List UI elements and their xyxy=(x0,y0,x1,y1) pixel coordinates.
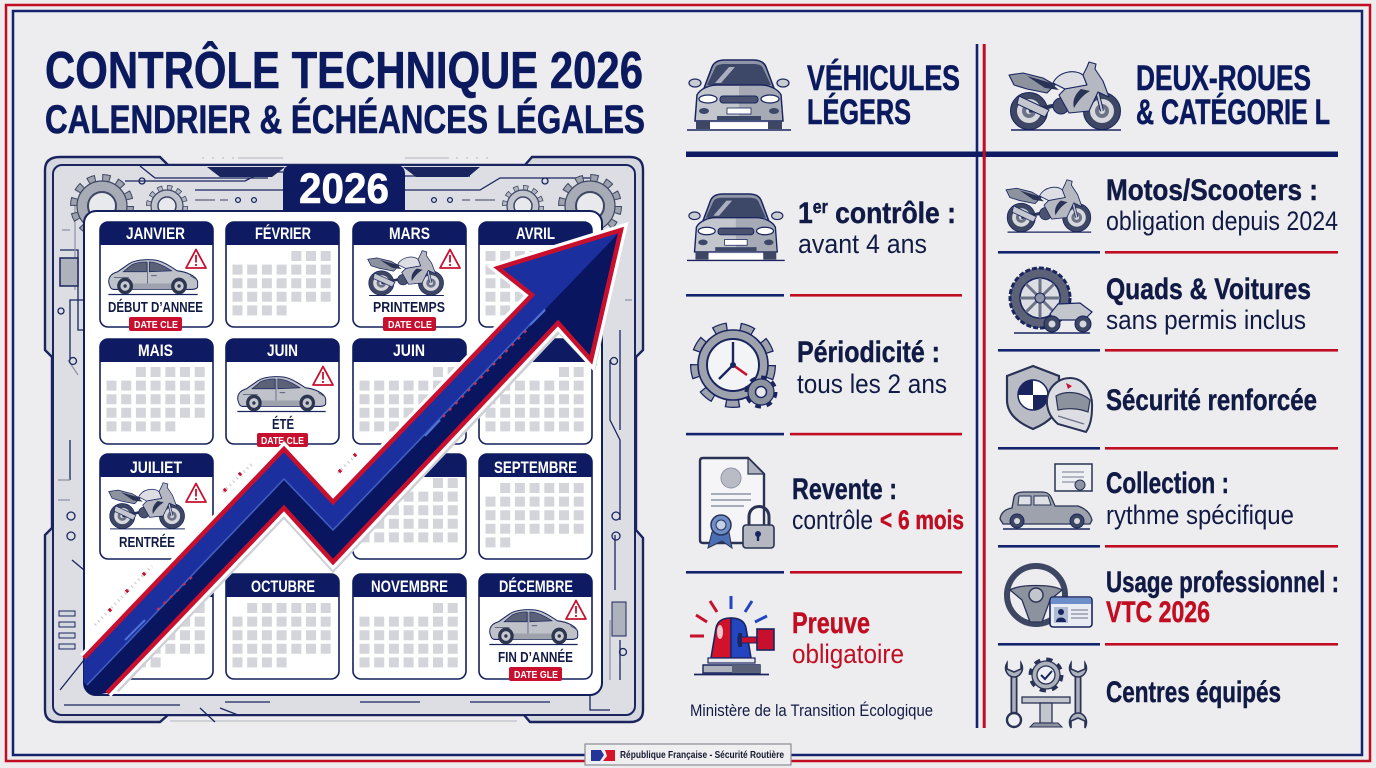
icon: certificate and lock xyxy=(700,458,774,548)
month: mais xyxy=(100,339,213,444)
text: premier contrôle xyxy=(798,197,956,259)
month: juillet: JUILIET xyxy=(130,459,182,477)
month: novembre xyxy=(353,574,466,679)
title xyxy=(45,41,645,142)
text: revente: < 6 mois xyxy=(880,505,964,535)
divider xyxy=(686,294,962,297)
text: périodicité: Périodicité : xyxy=(797,336,940,369)
divider xyxy=(998,447,1338,450)
month: mars: PRINTEMPS xyxy=(373,300,445,316)
red line over rule xyxy=(983,150,986,159)
heading: véhicules légers: VÉHICULES xyxy=(807,58,960,98)
text: motos xyxy=(1106,174,1338,236)
icon: siren xyxy=(690,596,774,674)
icon: motorbike xyxy=(1006,180,1091,232)
icon: steering wheel and card xyxy=(1007,566,1092,627)
month: février xyxy=(226,222,339,327)
month: janvier: DÉBUT D’ANNEE xyxy=(108,299,203,316)
icon: shield and helmet xyxy=(1007,366,1092,432)
month: hidden behind arrow, row 4 xyxy=(130,592,214,680)
text: périodicité: tous les 2 ans xyxy=(797,369,947,399)
calendar white panel xyxy=(84,211,602,695)
text: revente: Revente : xyxy=(792,473,897,506)
month: janvier xyxy=(100,222,213,331)
text: quads xyxy=(1106,273,1311,335)
text: quads: sans permis inclus xyxy=(1106,305,1306,335)
month: janvier: DATE CLE xyxy=(134,319,178,331)
month: octobre: OCTUBRE xyxy=(251,578,315,596)
icon: clock and gear xyxy=(695,327,775,406)
month: mais: MAIS xyxy=(138,342,173,360)
heading: véhicules légers: LÉGERS xyxy=(807,92,911,132)
month: janvier: JANVIER xyxy=(126,225,185,243)
text: preuve obligatoire: Preuve xyxy=(792,607,870,640)
trend arrow xyxy=(84,230,624,695)
month: septembre xyxy=(479,454,592,559)
month: juin (été) xyxy=(226,339,339,447)
month: juin (second): JUIN xyxy=(393,342,425,360)
month: décembre: DATE GLE xyxy=(514,669,558,681)
month: mars: MARS xyxy=(389,225,430,243)
heading: véhicules légers xyxy=(807,58,960,132)
text: preuve obligatoire: obligatoire xyxy=(792,639,904,669)
gears xyxy=(74,178,618,234)
text: premier contrôle: avant 4 ans xyxy=(798,229,927,259)
month: décembre: FIN D’ANNÉE xyxy=(498,649,573,666)
month: juin (second) xyxy=(353,339,466,444)
text: revente: contrôle xyxy=(792,505,873,535)
month: avril xyxy=(479,222,592,327)
text: quads: Quads & Voitures xyxy=(1106,273,1311,306)
text: sécurité: Sécurité renforcée xyxy=(1106,384,1317,417)
icon: vintage car and certificate xyxy=(1000,464,1092,529)
year tab: 2026 xyxy=(299,165,389,213)
icon: car front large xyxy=(687,60,791,130)
month: juin (été): JUIN xyxy=(267,342,298,360)
text: collection: Collection : xyxy=(1106,467,1229,500)
divider xyxy=(998,349,1338,352)
column separator xyxy=(976,44,986,728)
month: septembre: SEPTEMBRE xyxy=(494,459,577,477)
divider xyxy=(998,643,1338,646)
text: collection: rythme spécifique xyxy=(1106,500,1294,530)
footer badge xyxy=(585,744,791,765)
text: motos: Motos/Scooters : xyxy=(1106,174,1318,207)
panel: deux-roues xyxy=(998,59,1339,728)
icon: car front xyxy=(687,194,785,260)
header rule xyxy=(686,152,1338,157)
divider xyxy=(686,433,962,435)
title: CONTRÔLE TECHNIQUE 2026 xyxy=(45,41,643,100)
text: motos: obligation depuis 2024 xyxy=(1106,206,1338,236)
month: avril: AVRIL xyxy=(516,225,555,243)
icon: quad and tyre xyxy=(1010,268,1092,333)
month: juillet xyxy=(100,454,213,559)
calendar frame xyxy=(45,157,643,722)
title: CALENDRIER & ÉCHÉANCES LÉGALES xyxy=(45,97,645,142)
text: centres équipés: Centres équipés xyxy=(1106,676,1281,709)
icon: tools and gear xyxy=(1006,660,1086,728)
text: premier contrôle: er xyxy=(813,197,828,217)
icon: motorbike large xyxy=(1009,62,1121,130)
month: mars xyxy=(353,222,466,331)
month: novembre: NOVEMBRE xyxy=(371,578,448,596)
text: périodicité xyxy=(797,336,947,399)
dashed speed ticks xyxy=(95,453,358,625)
footer badge: République Française - Sécurité Routière xyxy=(620,749,784,761)
month: octobre xyxy=(226,574,339,679)
icon: french flag xyxy=(591,750,615,761)
month: hidden behind arrow, row 2 xyxy=(479,339,592,444)
month: juillet: RENTRÉE xyxy=(119,534,175,551)
text: revente xyxy=(792,473,964,535)
month: décembre: DÉCEMBRE xyxy=(499,577,573,596)
text: preuve obligatoire xyxy=(792,607,904,669)
month: mars: DATE CLE xyxy=(388,319,432,331)
text: collection xyxy=(1106,467,1294,530)
text: premier contrôle: 1 xyxy=(798,197,815,230)
divider xyxy=(998,545,1338,548)
divider xyxy=(686,571,962,574)
month: décembre xyxy=(479,574,592,681)
text: usage professionnel: VTC 2026 xyxy=(1106,596,1210,629)
month: hidden behind arrow, row 3 xyxy=(353,454,466,559)
heading: deux-roues: DEUX-ROUES xyxy=(1136,59,1311,98)
month: juin (été): DATE CLE xyxy=(261,435,304,447)
month: juin (été): ÉTÉ xyxy=(272,416,294,433)
heading: deux-roues xyxy=(1136,59,1330,132)
text: usage professionnel xyxy=(1106,566,1339,629)
divider xyxy=(998,251,1338,254)
panel: véhicules légers xyxy=(686,58,964,720)
month: février: FÉVRIER xyxy=(255,224,311,243)
text: premier contrôle: contrôle : xyxy=(828,197,956,230)
source: Ministère de la Transition Écologique xyxy=(690,701,933,720)
